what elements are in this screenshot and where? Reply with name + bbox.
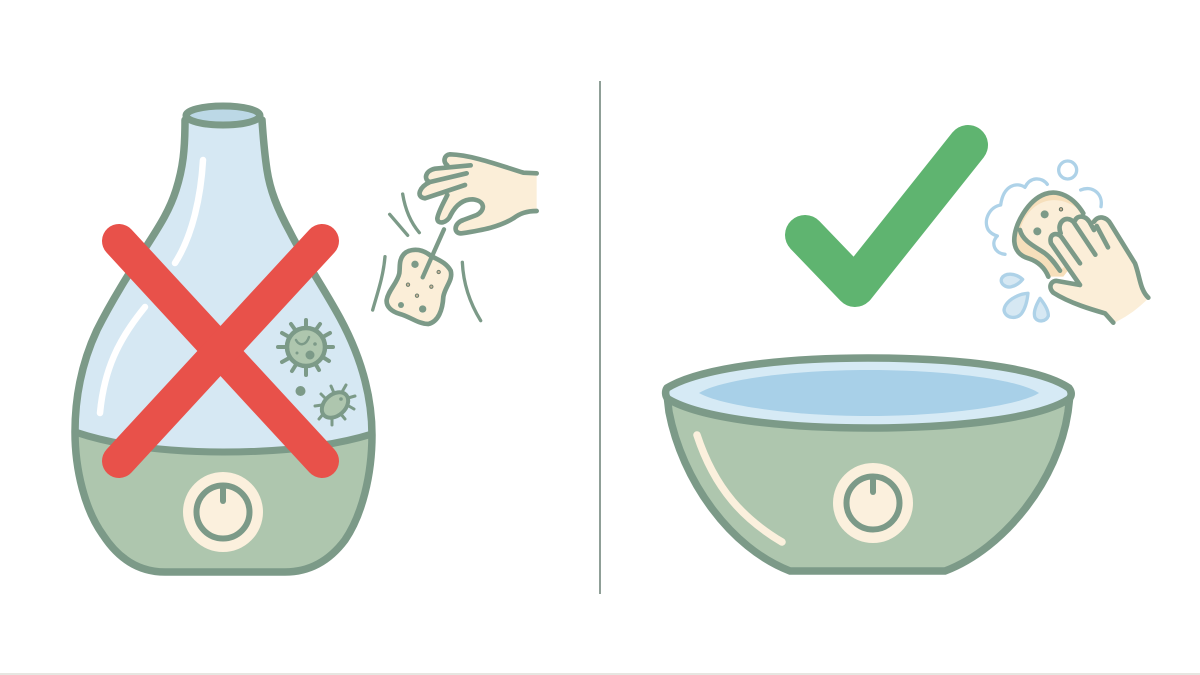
humidifier base [75,432,372,572]
sponge pores [398,261,440,313]
germ dot [296,386,306,396]
waterline [75,432,372,452]
bowl knob [833,463,913,543]
motion lines [373,194,481,321]
bowl rim with water [666,358,1071,428]
humidifier tank [75,120,372,572]
icon: bacterium [315,385,355,425]
green check mark [805,145,968,287]
water drops [1001,274,1048,321]
panel: bowl of water (right) [666,358,1071,571]
icon: hand washing sponge [986,161,1148,323]
icon: virus germ [278,320,333,375]
sponge [1014,193,1087,277]
bowl body [667,395,1070,571]
red cross mark [119,241,322,461]
icon: hand dropping sponge [373,154,537,324]
humidifier opening [186,106,260,125]
water surface [699,370,1039,416]
power knob [183,472,263,552]
hand [1050,217,1148,323]
bowl highlight [697,435,782,542]
falling string [423,229,444,277]
suds [986,161,1101,254]
humidifier outline [75,120,372,572]
panel: humidifier (wrong) [75,106,372,572]
sponge [387,250,451,324]
glass highlight [100,160,203,413]
divider between panels [599,81,601,594]
hand [420,154,537,233]
